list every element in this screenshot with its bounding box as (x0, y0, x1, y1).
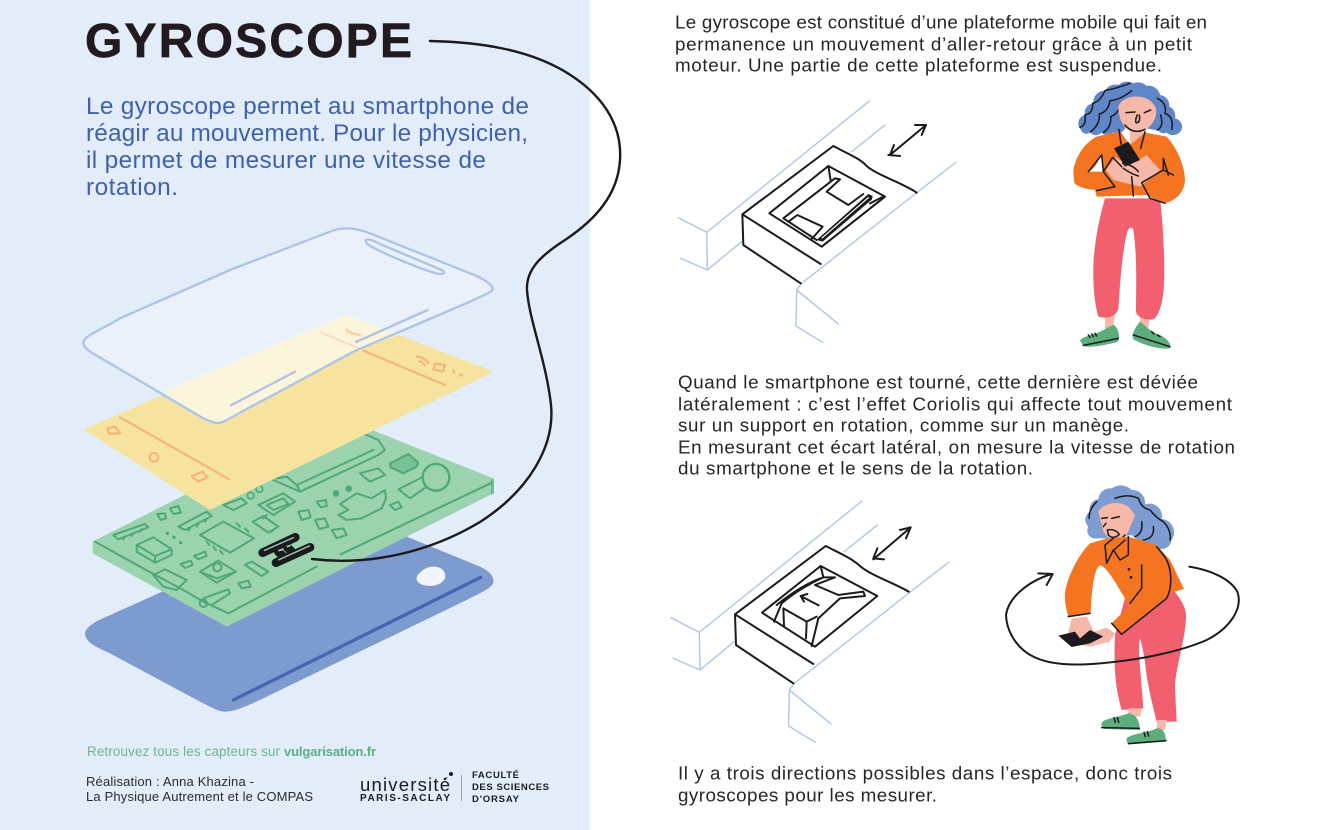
credits (86, 774, 313, 804)
logo: université Paris-Saclay: D'ORSAY (472, 794, 520, 805)
component cluster (113, 524, 148, 539)
credits: Réalisation : Anna Khazina - (86, 774, 254, 789)
hair (1085, 485, 1174, 550)
rotation arrow (1006, 567, 1239, 664)
text block: Coriolis effect: En mesurant cet écart latéral, on mesure la vitesse de rotation (678, 436, 1235, 458)
intro text: il permet de mesurer une vitesse de (86, 147, 486, 174)
text block: platform description: Le gyroscope est constitué d’une plateforme mobile qui fait en (675, 12, 1207, 32)
credits: La Physique Autrement et le COMPAS (86, 789, 313, 804)
logo: université Paris-Saclay: université (360, 774, 450, 795)
panel: left background (0, 0, 590, 830)
text block: three directions (678, 762, 1172, 806)
gyroscope chip (263, 537, 310, 563)
intro text: rotation. (86, 174, 178, 201)
text block: three directions: Il y a trois directions possibles dans l’espace, donc trois (678, 762, 1172, 784)
character: woman looking at phone (1073, 82, 1185, 349)
text block: platform description: permanence un mouvement d’aller-retour grâce à un petit (675, 34, 1193, 54)
hair (1078, 82, 1182, 135)
intro text: Le gyroscope permet au smartphone de (86, 93, 529, 120)
body (1130, 132, 1145, 148)
text block: platform description: moteur. Une partie de cette plateforme est suspendue. (675, 54, 1162, 76)
diagram: sensor at rest (678, 101, 956, 342)
text block: Coriolis effect: sur un support en rotation, comme sur un manège. (678, 414, 1129, 436)
illustration: exploded smartphone layers (83, 228, 494, 712)
text block: Coriolis effect: Quand le smartphone est tourné, cette dernière est déviée (678, 372, 1198, 392)
intro text (86, 93, 529, 201)
layer: yellow screen (83, 315, 494, 510)
layer: green circuit board (93, 417, 494, 627)
diagram: sensor deflected (671, 501, 949, 742)
layer: glass cover (83, 228, 493, 423)
footer link: Retrouvez tous les capteurs sur (87, 744, 281, 759)
text block: platform description (675, 12, 1207, 76)
text block: Coriolis effect: latéralement : c’est l’effet Coriolis qui affecte tout mouvement (678, 394, 1233, 414)
body (1098, 503, 1135, 543)
logo: université Paris-Saclay: FACULTÉ (472, 770, 519, 781)
footer link url: vulgarisation.fr (284, 744, 376, 759)
intro text: réagir au mouvement. Pour le physicien, (86, 120, 528, 147)
character: woman rotating phone (1006, 485, 1239, 744)
layer: blue back cover (85, 537, 493, 712)
callout line from chip to title (312, 41, 620, 561)
logo: université Paris-Saclay (360, 770, 549, 805)
title: GYROSCOPE (85, 15, 412, 68)
text block: Coriolis effect (678, 372, 1235, 478)
logo: université Paris-Saclay: PARIS-SACLAY (360, 793, 450, 804)
text block: three directions: gyroscopes pour les mesurer. (678, 784, 937, 806)
text block: Coriolis effect: du smartphone et le sens de la rotation. (678, 458, 1033, 478)
logo: université Paris-Saclay: DES SCIENCES (472, 782, 549, 793)
